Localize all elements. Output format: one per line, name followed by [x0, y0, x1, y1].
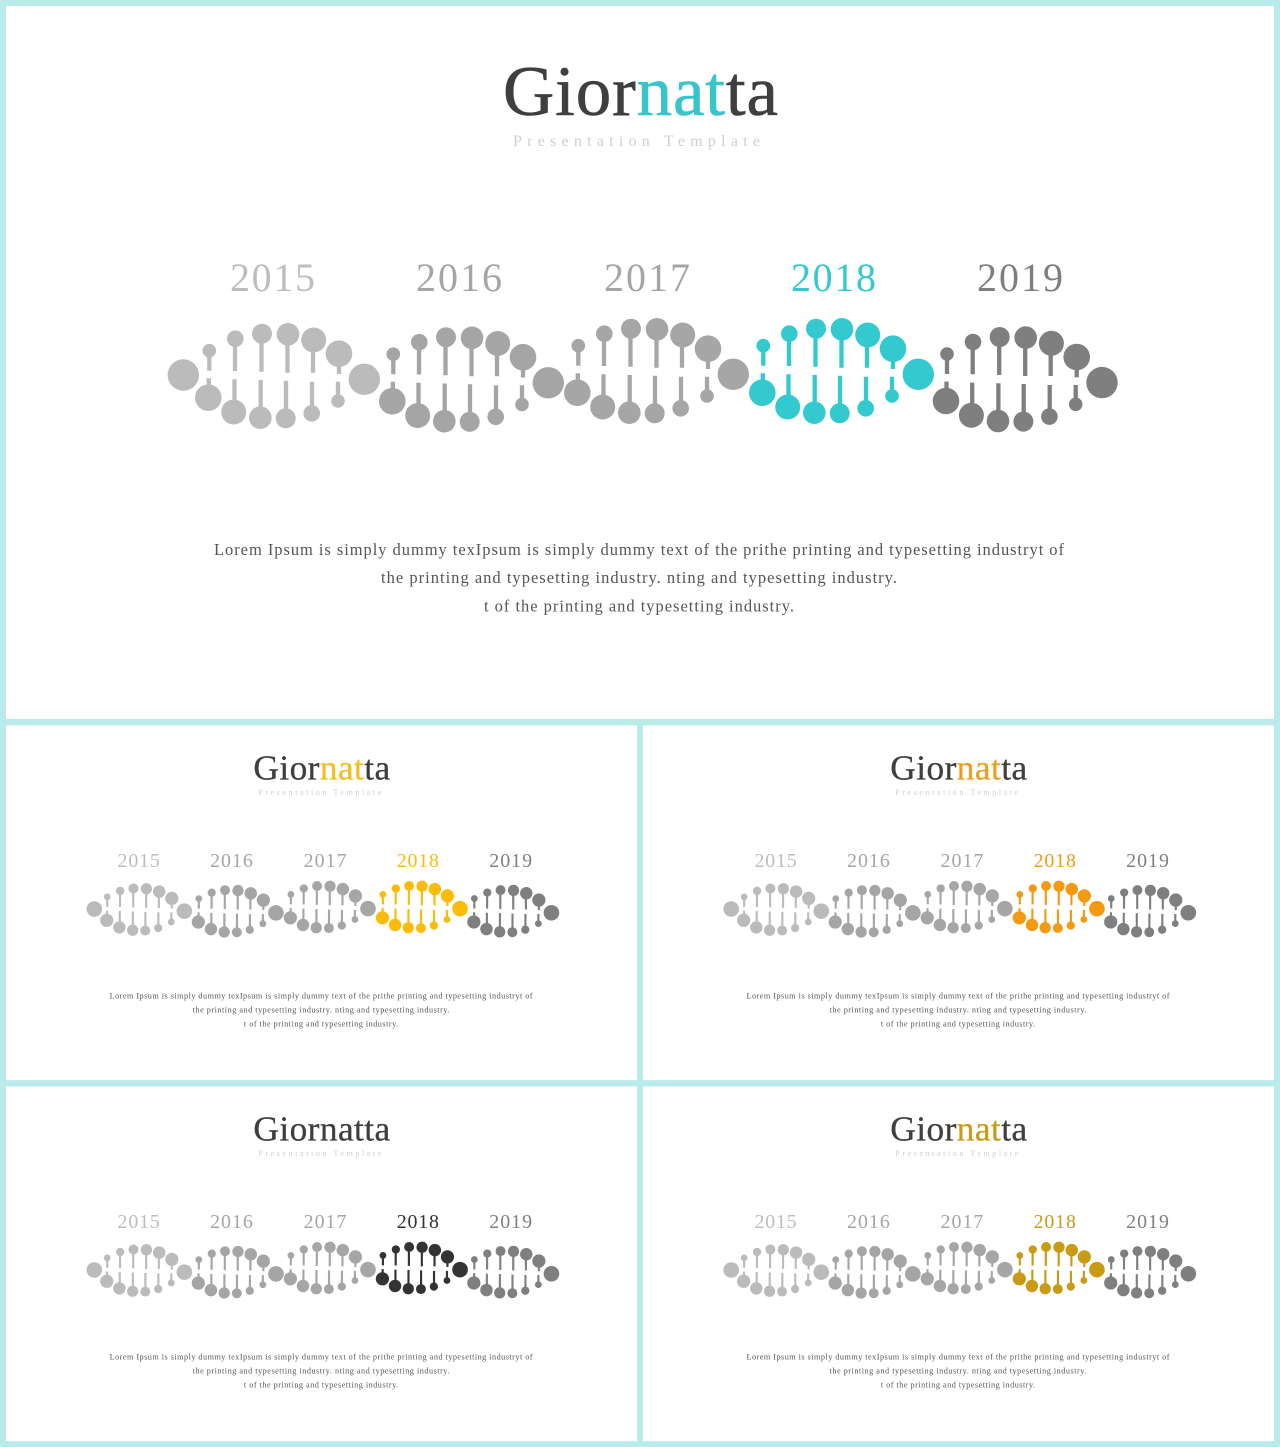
panel: dark slide: t of the printing and typesetting industry. [244, 1381, 398, 1390]
panel: orange slide: the printing and typesetting industry. nting and typesetting industry. [830, 1006, 1086, 1015]
panel: yellow slide: Giornatta [253, 749, 391, 788]
panel: gold slide: 2016 [847, 1211, 890, 1233]
panel: dark slide: 2015 [118, 1211, 160, 1233]
panel: main slide [6, 6, 1274, 719]
year labels: 2016 [416, 255, 502, 300]
panel: gold slide: Giornatta [890, 1110, 1027, 1149]
panel: orange slide: 2017 [941, 850, 983, 872]
panel: yellow slide: the printing and typesetting industry. nting and typesetting industry. [193, 1006, 449, 1015]
panel: yellow slide: 2019 [489, 850, 532, 872]
panel: yellow slide: 2015 [118, 850, 160, 872]
panel: orange slide: 2015 [754, 850, 797, 872]
panel: gold slide: 2017 [941, 1211, 983, 1233]
year labels: 2018 [791, 255, 876, 300]
panel: yellow slide: Presentation Template [258, 788, 382, 797]
panel: orange slide: Giornatta [890, 749, 1027, 788]
panel: yellow slide: 2018 [397, 850, 439, 872]
panel: orange slide: t of the printing and typesetting industry. [881, 1020, 1035, 1029]
panel: gold slide: 2018 [1034, 1211, 1076, 1233]
year labels: 2019 [977, 255, 1063, 300]
panel: orange slide: 2019 [1126, 850, 1169, 872]
panel: dark slide: 2018 [397, 1211, 439, 1233]
year labels: 2015 [230, 255, 315, 300]
panel: yellow slide: Lorem Ipsum is simply dummy texIpsum is simply dummy text of the prithe printing and typesetting industryt of [110, 992, 533, 1001]
DNA helix timeline [168, 318, 1118, 433]
panel: gold slide: t of the printing and typesetting industry. [881, 1381, 1035, 1390]
panel: yellow slide: t of the printing and typesetting industry. [244, 1020, 398, 1029]
title: Giornatta [503, 53, 778, 131]
body text [214, 540, 1064, 616]
panel: dark slide [6, 1086, 637, 1441]
panel: orange slide: 2016 [847, 850, 890, 872]
panel: gold slide [643, 1086, 1274, 1441]
panel: dark slide: 2016 [210, 1211, 253, 1233]
panel: yellow slide: 2017 [304, 850, 346, 872]
panel: gold slide: 2015 [754, 1211, 797, 1233]
panel: gold slide: 2019 [1126, 1211, 1169, 1233]
panel: orange slide: 2018 [1034, 850, 1076, 872]
panel: dark slide: 2017 [304, 1211, 346, 1233]
panel: orange slide: Lorem Ipsum is simply dummy texIpsum is simply dummy text of the prithe printing and typesetting industryt of [746, 992, 1170, 1001]
panel: gold slide: Lorem Ipsum is simply dummy texIpsum is simply dummy text of the prithe printing and typesetting industryt of [746, 1353, 1170, 1362]
panel: orange slide [643, 725, 1274, 1080]
panel: dark slide: Lorem Ipsum is simply dummy texIpsum is simply dummy text of the prithe printing and typesetting industryt of [110, 1353, 533, 1362]
year labels: 2017 [604, 255, 690, 300]
year labels [230, 255, 1063, 300]
subtitle: Presentation Template [513, 133, 760, 150]
panel: dark slide: the printing and typesetting industry. nting and typesetting industry. [193, 1367, 449, 1376]
panel: dark slide: Giornatta [253, 1110, 391, 1149]
body text: the printing and typesetting industry. nting and typesetting industry. [381, 568, 897, 587]
body text: t of the printing and typesetting industry. [484, 596, 794, 616]
panel: yellow slide: 2016 [210, 850, 253, 872]
body text: Lorem Ipsum is simply dummy texIpsum is simply dummy text of the prithe printing and typesetting industryt of [214, 540, 1064, 559]
panel: yellow slide [6, 725, 637, 1080]
panel: dark slide: Presentation Template [258, 1149, 382, 1158]
panel: gold slide: Presentation Template [895, 1149, 1019, 1158]
panel: orange slide: Presentation Template [895, 788, 1019, 797]
panel: dark slide: 2019 [489, 1211, 532, 1233]
panel: gold slide: the printing and typesetting industry. nting and typesetting industry. [830, 1367, 1086, 1376]
